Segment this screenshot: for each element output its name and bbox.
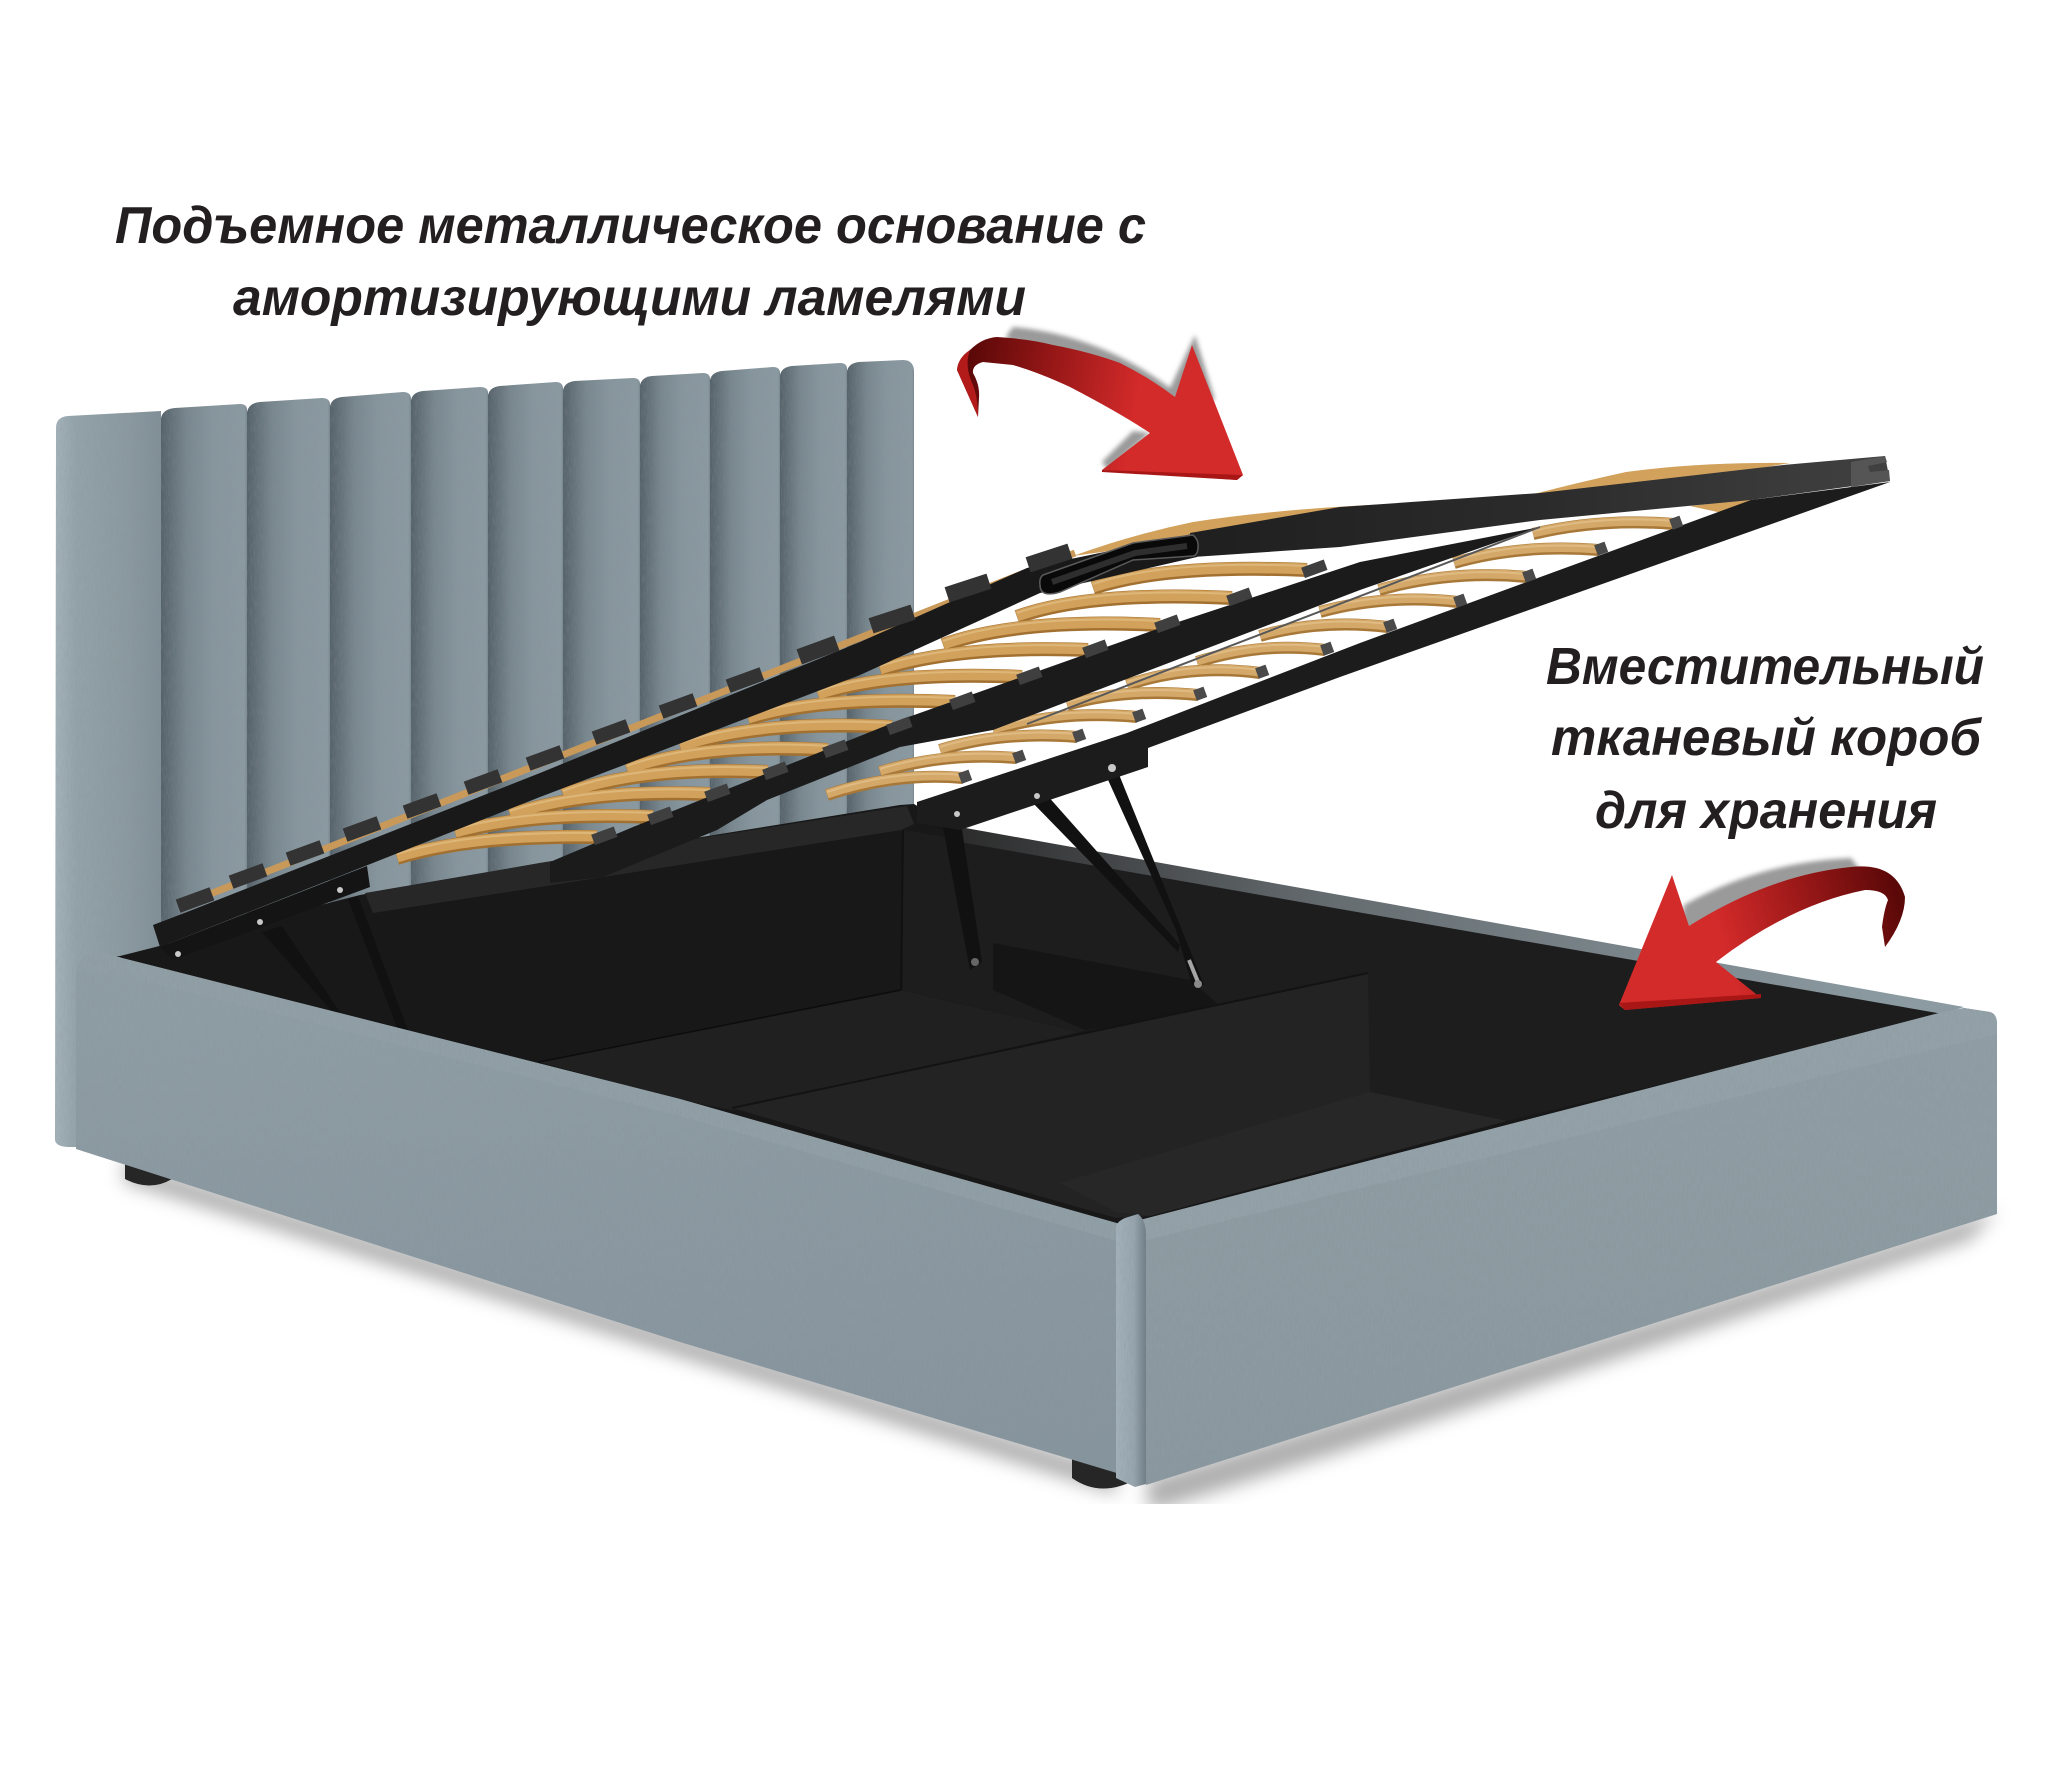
slat holders on front rail [958, 516, 1683, 784]
arrow 1 head edge [1102, 470, 1243, 480]
far side rim [960, 827, 1964, 1014]
slats left set [397, 565, 1307, 858]
back wall rim strip [365, 806, 914, 913]
arrow 1 tail underside [957, 350, 978, 417]
middle rail [550, 527, 1540, 883]
back rail bottom flange [160, 866, 370, 960]
right brace [1030, 794, 1180, 952]
right face top band [1140, 1008, 1997, 1240]
pins [175, 764, 1116, 957]
heading: lifting base line 2: амортизирующими ламелями [233, 269, 1026, 327]
right back wall [903, 830, 1960, 1121]
floor shadow [124, 1160, 1997, 1512]
far wooden slats [1073, 463, 1790, 556]
heading: lifting base line 1: Подъемное металлическое основание с [115, 197, 1146, 255]
heading: storage box line 3: для хранения [1595, 782, 1937, 840]
arrow: storage box [1619, 866, 1905, 1010]
right gas strut [1104, 767, 1204, 985]
arrow 1 shadow [1007, 327, 1215, 470]
handle [1040, 535, 1198, 594]
left compartment floor [539, 990, 1080, 1110]
wood strip along rail [200, 553, 1075, 898]
storage box interior [96, 804, 1964, 1225]
bed feet [125, 1160, 1135, 1489]
front rail [917, 482, 1890, 830]
mounting plate [993, 943, 1225, 1030]
gas lift struts [262, 767, 1204, 1030]
arrow 2 head edge [1619, 994, 1761, 1010]
back rail flat section [1190, 456, 1890, 557]
left brace [262, 926, 340, 1014]
divider wall [732, 973, 1507, 1218]
slat holders on middle rail [591, 560, 1328, 845]
handle recess [1052, 546, 1187, 582]
right compartment floor [1060, 1092, 1507, 1216]
back corner line [901, 830, 903, 990]
arrow: lifting base [957, 337, 1243, 480]
long left face [76, 952, 1120, 1474]
long face top band [78, 952, 1120, 1242]
right face [1140, 1008, 1997, 1485]
image crop edge [0, 1504, 2050, 1788]
lifting metal frame [153, 456, 1890, 960]
divider edge [732, 973, 1368, 1108]
arrow 2 shadow [1680, 858, 1860, 940]
slat holders on back rail [176, 544, 1072, 913]
left gas strut [348, 896, 408, 1030]
headboard [55, 360, 914, 1147]
bed base upholstered faces [76, 952, 1997, 1487]
heading: storage box line 1: Вместительный [1546, 638, 1984, 696]
slats right set [827, 519, 1674, 795]
rail end profile [1851, 456, 1890, 487]
piston end fittings [971, 958, 1202, 988]
corner panel [1116, 1214, 1146, 1487]
back rail diagonal [153, 533, 1197, 947]
right vertical arm [942, 816, 982, 970]
heading: storage box line 2: тканевый короб [1551, 709, 1983, 767]
